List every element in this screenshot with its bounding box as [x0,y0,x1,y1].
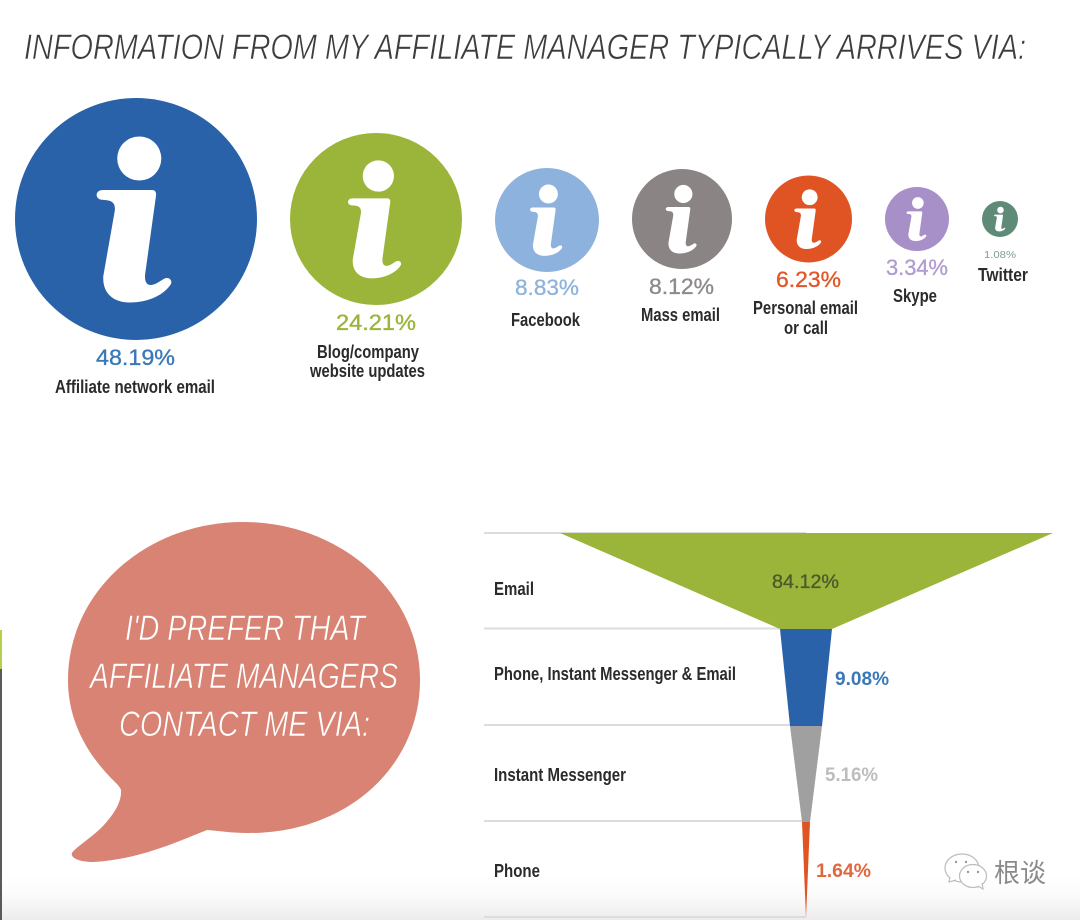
icon: blue info circle [15,98,257,340]
label: twitter: Twitter [978,265,1028,285]
value: 1.64%: 1.64% [816,861,871,882]
funnel segment: email [560,533,1053,629]
label: instant messenger: Instant Messenger [494,765,626,785]
value: 5.16%: 5.16% [825,765,878,786]
label: personal email or call: Personal email [753,298,858,318]
label: personal email or call [753,298,858,338]
item: skype [885,187,949,306]
label: mass email: Mass email [641,305,720,325]
value: 1.08%: 1.08% [984,249,1016,261]
bubble heading: AFFILIATE MANAGERS [88,657,398,696]
value: 8.12%: 8.12% [649,274,714,299]
icon: teal info circle [982,201,1018,237]
funnel chart [484,533,1053,918]
value: 48.19%: 48.19% [96,345,175,370]
label: blog/company website updates: Blog/company [317,342,419,362]
label: blog/company website updates: website updates [309,361,425,381]
label: phone: Phone [494,861,540,881]
funnel segment: phone [802,822,810,918]
icon: green info circle [290,133,462,305]
item: affiliate network email [15,98,257,397]
watermark [945,854,1046,889]
label: blog/company website updates [309,342,425,381]
bubble shape [68,522,420,862]
funnel segment: instant messenger [790,726,822,822]
value: 9.08%: 9.08% [835,669,889,690]
bubble heading: I'D PREFER THAT [125,609,367,648]
label: phone, instant messenger and email: Phone, Instant Messenger & Email [494,664,736,684]
panel: arrival channels [15,98,1028,397]
item: personal email or call [753,176,858,338]
watermark text: 根谈 [994,858,1046,888]
label: skype: Skype [893,286,937,306]
funnel segment: phone, IM and email [780,629,832,726]
label: email: Email [494,579,534,599]
bubble heading: CONTACT ME VIA: [119,705,370,744]
item: blog/company website updates [290,133,462,381]
item: mass email [632,169,732,325]
speech bubble callout [68,522,420,862]
label: affiliate network email: Affiliate network email [55,377,215,397]
item: twitter [978,201,1028,285]
value: 84.12%: 84.12% [772,572,839,593]
value: 3.34%: 3.34% [886,255,948,280]
value: 6.23%: 6.23% [776,267,841,292]
icon: purple info circle [885,187,949,251]
value: 8.83%: 8.83% [515,275,579,300]
icon: orange info circle [765,176,852,262]
icon: chat bubbles [945,854,986,889]
label: facebook: Facebook [511,310,581,330]
icon: light blue info circle [495,168,599,272]
item: facebook [495,168,599,330]
value: 24.21%: 24.21% [336,310,416,335]
label: personal email or call: or call [784,318,828,338]
icon: grey info circle [632,169,732,269]
bubble heading [88,609,398,744]
